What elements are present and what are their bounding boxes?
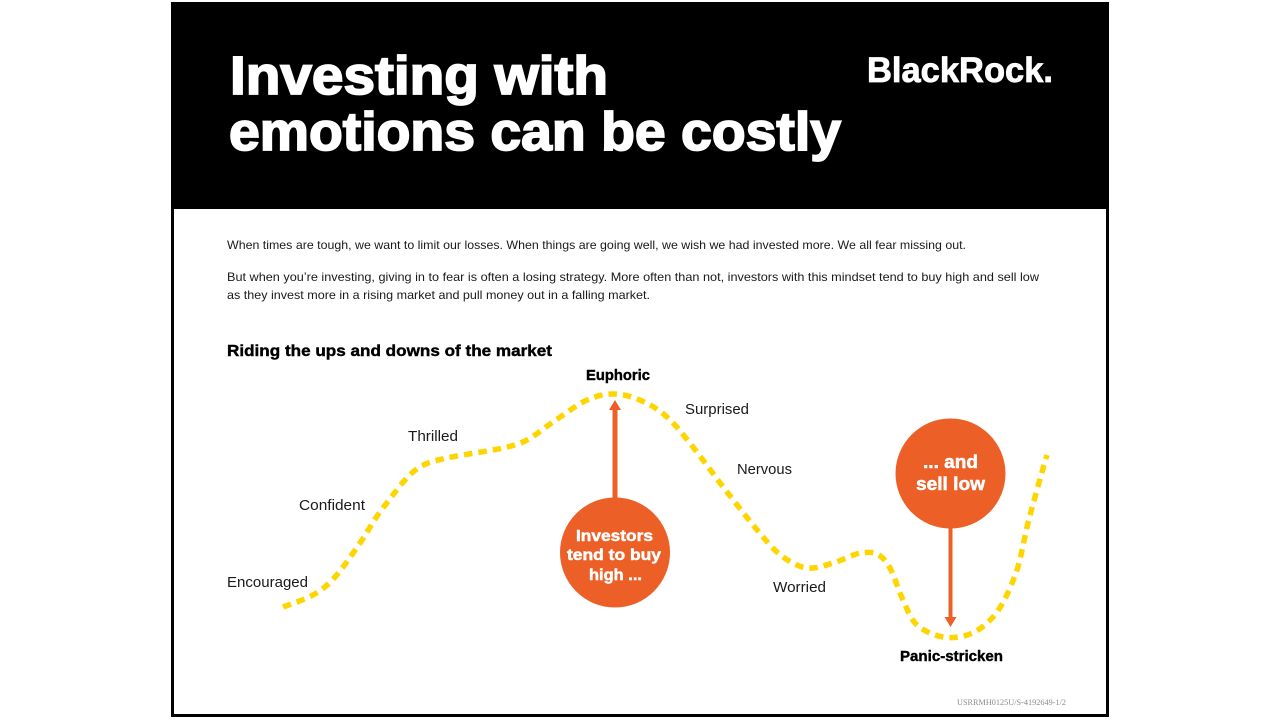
page frame [172, 4, 1108, 716]
callout: sell low: ... and [923, 452, 978, 472]
header band [171, 2, 1109, 209]
label: Encouraged: Encouraged [227, 575, 308, 591]
market emotion curve [283, 394, 1047, 638]
label: Surprised: Surprised [685, 402, 749, 418]
label: Thrilled: Thrilled [408, 429, 458, 445]
label: Worried: Worried [773, 580, 826, 596]
intro text [227, 238, 1039, 302]
logo: BlackRock: BlackRock. [867, 51, 1053, 90]
arrow: up to market peak [609, 400, 621, 500]
label: Euphoric: Euphoric [586, 368, 650, 384]
label: Nervous: Nervous [737, 462, 792, 478]
chart heading: Riding the ups and downs of the market [227, 343, 552, 360]
callout: buy high: high ... [589, 567, 642, 584]
footer code: USRRMH0125U/S-4192649-1/2 [957, 698, 1066, 707]
callout: buy high [560, 498, 670, 608]
callout: sell low [896, 418, 1006, 528]
callout: sell low: sell low [916, 474, 986, 494]
intro text: When times are tough, we want to limit our losses. When things are going well, we wish we had invested more. We all fear missing out. [227, 238, 966, 252]
title: Investing with [230, 46, 608, 106]
label: Panic-stricken: Panic-stricken [900, 649, 1003, 665]
callout: buy high: Investors [576, 528, 653, 545]
intro text: But when you’re investing, giving in to fear is often a losing strategy. More often than not, investors with this mindset tend to buy high and sell low [227, 270, 1039, 284]
intro text: as they invest more in a rising market and pull money out in a falling market. [227, 288, 650, 302]
label: Confident: Confident [299, 498, 365, 514]
callout: buy high: tend to buy [567, 547, 661, 564]
title: emotions can be costly [229, 102, 841, 162]
arrow: down to market trough [944, 526, 956, 627]
title [229, 46, 841, 162]
